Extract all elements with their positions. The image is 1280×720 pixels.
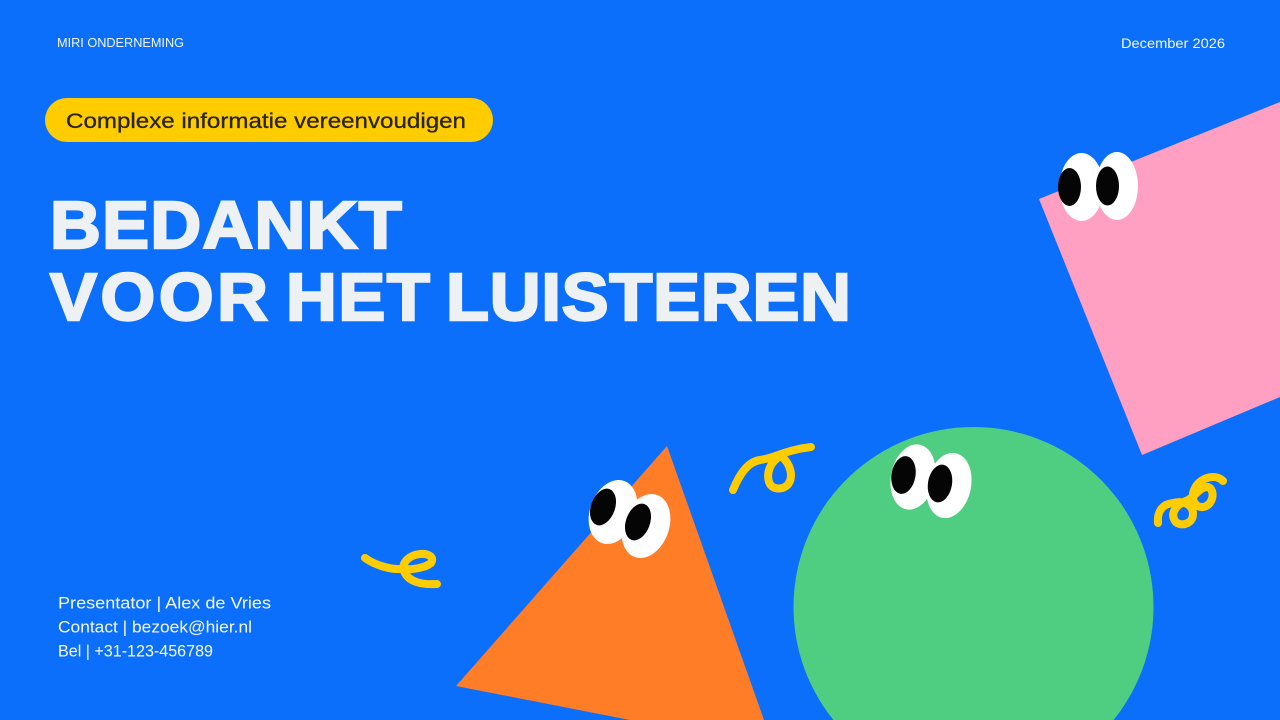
title: HET	[286, 260, 430, 335]
contact details: Bel | +31-123-456789	[58, 642, 213, 660]
pink square character	[1039, 102, 1280, 455]
date: December 2026	[1121, 36, 1225, 51]
yellow squiggle left	[365, 554, 437, 584]
yellow squiggle middle	[733, 447, 811, 490]
title: LUISTEREN	[446, 260, 851, 335]
company name: MIRI ONDERNEMING	[57, 35, 184, 50]
contact details: Presentator | Alex de Vries	[58, 594, 271, 612]
title	[50, 188, 851, 335]
subtitle pill: Complexe informatie vereenvoudigen	[66, 109, 466, 133]
title: BEDANKT	[50, 188, 402, 263]
contact details	[58, 594, 271, 660]
title: VOOR	[50, 260, 268, 335]
yellow squiggle right	[1158, 477, 1223, 524]
orange triangle character	[456, 446, 764, 720]
subtitle pill	[45, 98, 493, 142]
green circle character	[794, 427, 1153, 720]
contact details: Contact | bezoek@hier.nl	[58, 618, 252, 636]
